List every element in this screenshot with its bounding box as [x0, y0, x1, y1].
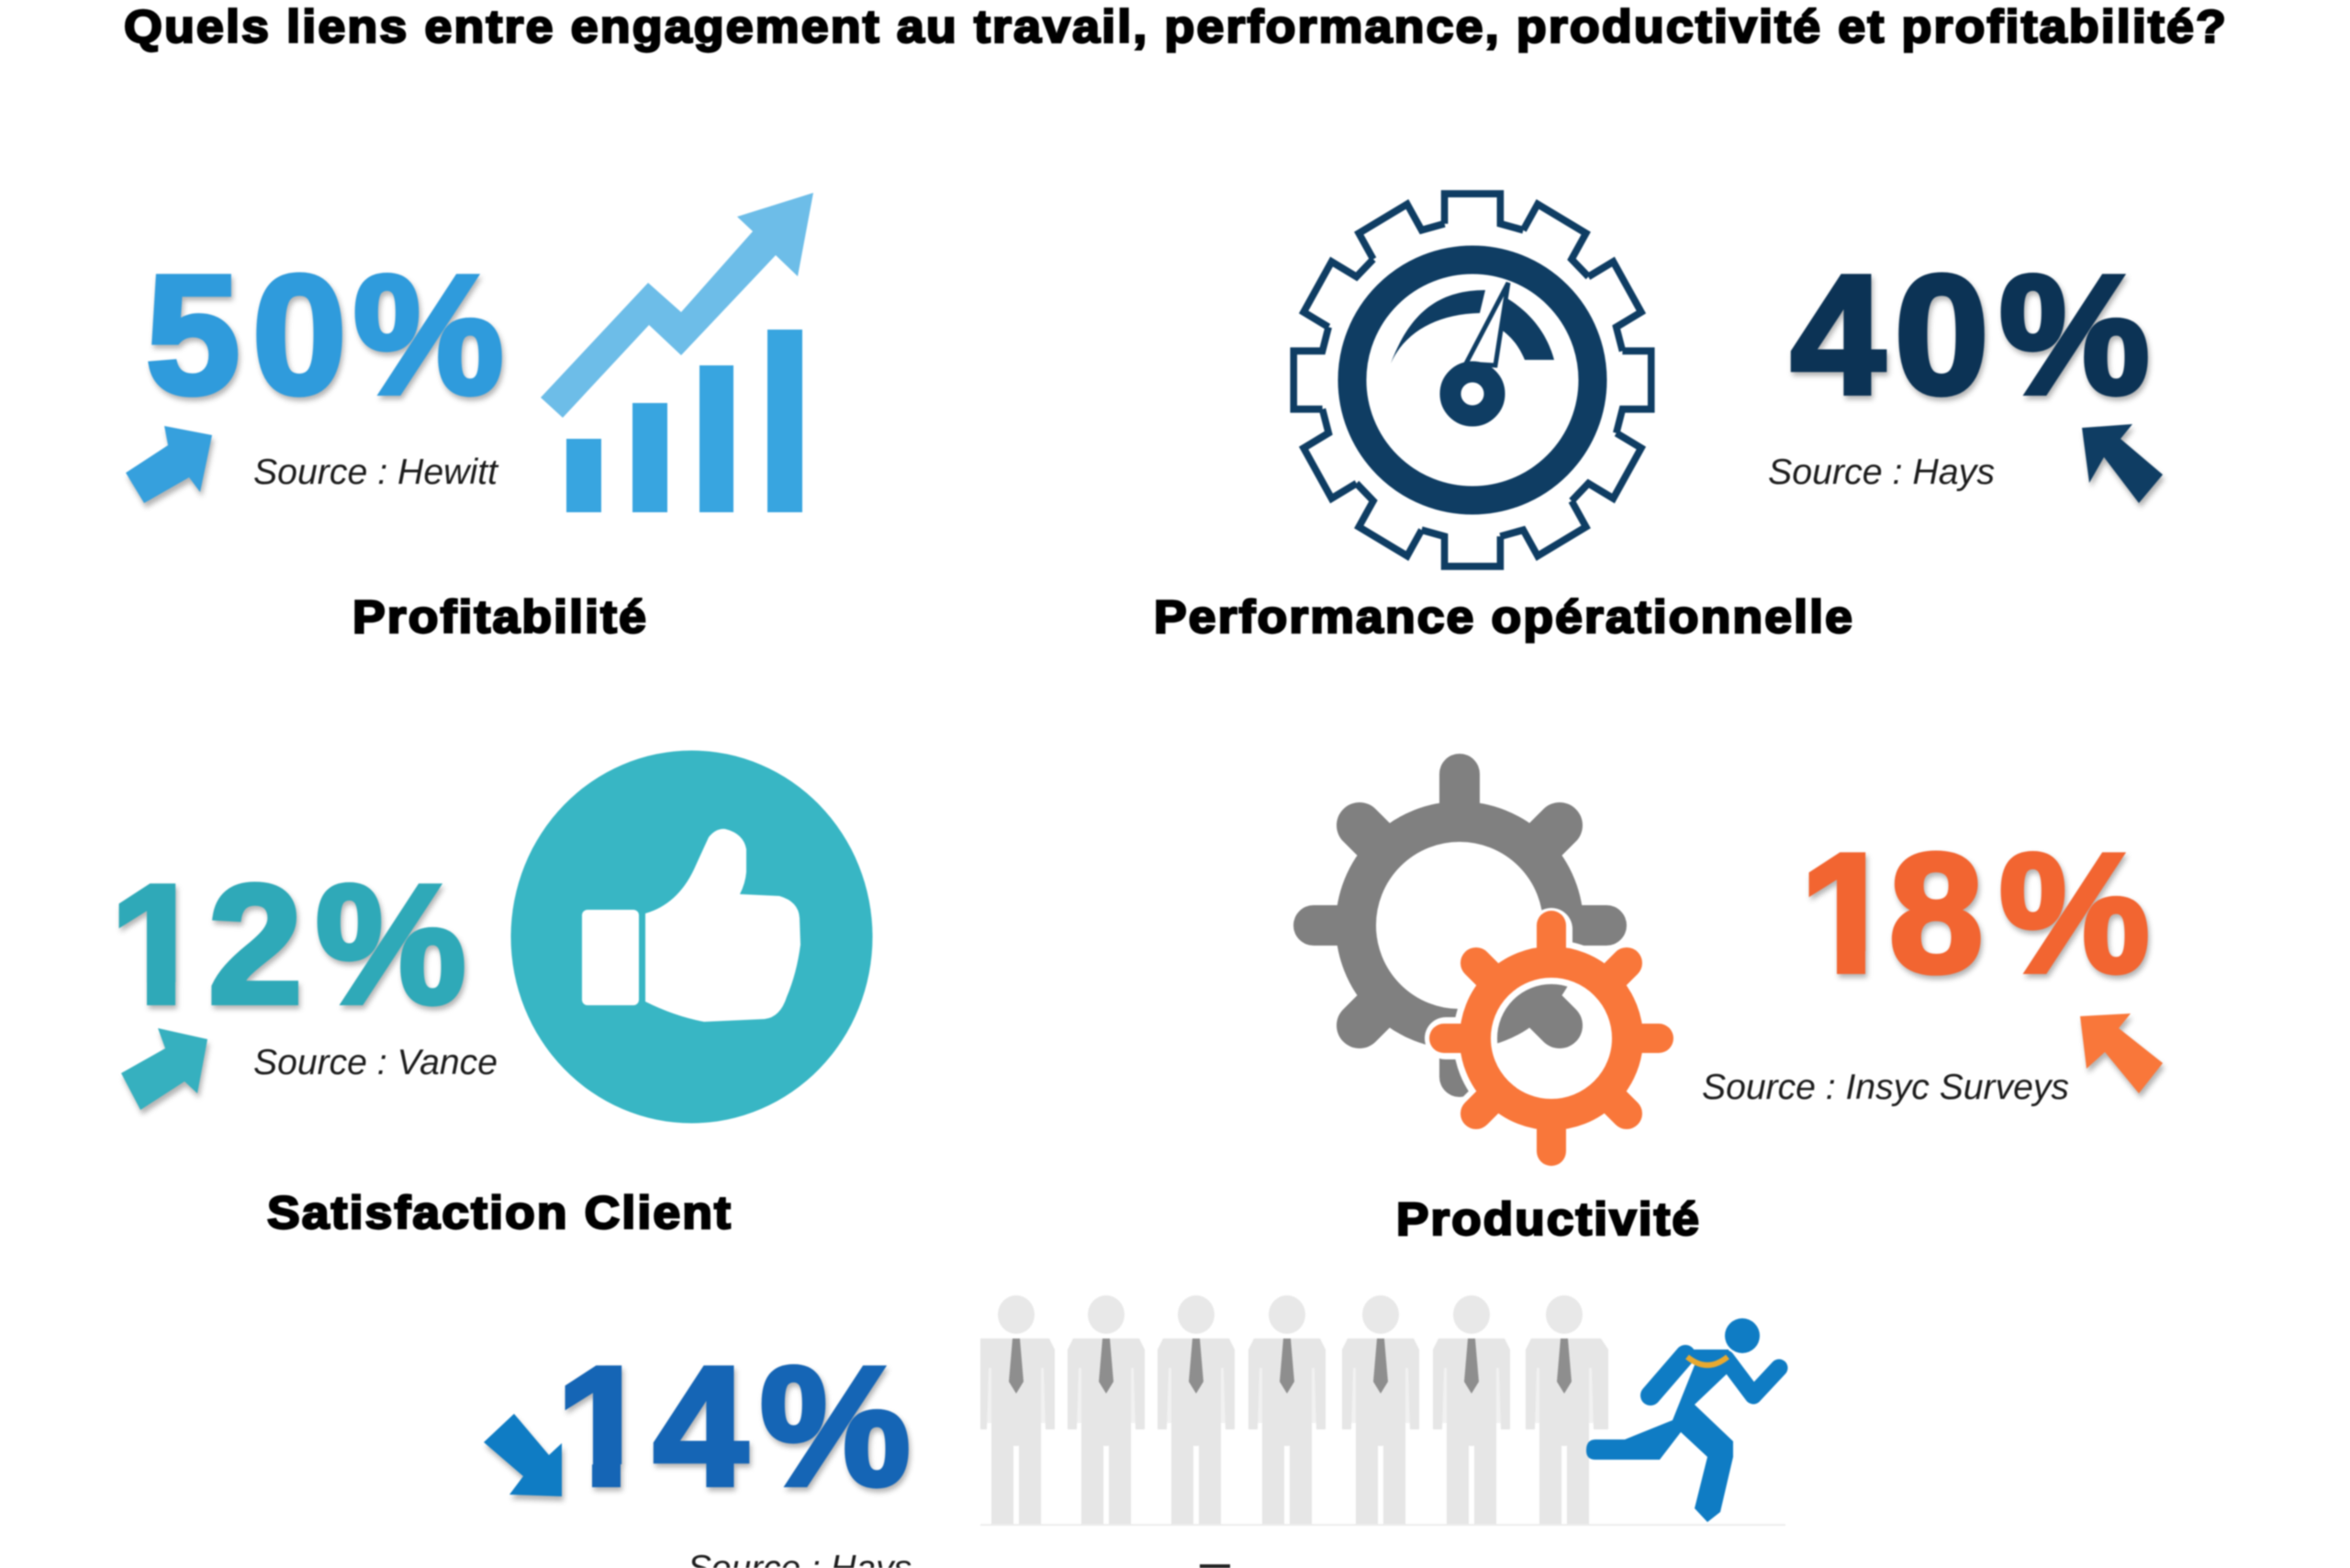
arrow: up left	[2082, 424, 2163, 503]
source: Hays: Source : Hays	[1768, 453, 1995, 492]
source: Insyc Surveys: Source : Insyc Surveys	[1702, 1068, 2069, 1107]
panel: profitabilité	[126, 193, 813, 643]
figure 3	[1158, 1295, 1235, 1524]
figure 4	[1248, 1295, 1326, 1524]
arrow: down right	[484, 1414, 562, 1496]
arrow: up right	[121, 1028, 207, 1110]
label: Performance opérationnelle: Performance opérationnelle	[1154, 591, 1854, 643]
icon: running employee	[1586, 1318, 1779, 1522]
stat: 14%: 14%	[556, 1331, 911, 1520]
icon: row of standing employees	[980, 1295, 1785, 1525]
clipped label top	[1200, 1564, 1230, 1568]
figure 1	[980, 1295, 1055, 1524]
title: Quels liens entre engagement au travail, performance, productivité et profitabilité?	[124, 1, 2228, 52]
arrow: up left	[2080, 1014, 2163, 1093]
arrow: up right	[126, 426, 212, 503]
label: Profitabilité: Profitabilité	[352, 591, 648, 643]
label: Productivité: Productivité	[1396, 1193, 1701, 1245]
figure 7	[1526, 1295, 1608, 1524]
icon: grey and orange gears	[1314, 774, 1659, 1151]
stat: 40%: 40%	[1791, 240, 2150, 429]
panel: performance opérationnelle	[1154, 192, 2163, 643]
icon: thumbs up	[510, 751, 872, 1124]
panel: satisfaction client	[110, 751, 872, 1238]
bar chart icon	[566, 330, 802, 512]
stat: 50%: 50%	[146, 240, 504, 429]
label: Satisfaction Client: Satisfaction Client	[267, 1187, 733, 1238]
stat: 18%: 18%	[1800, 818, 2150, 1007]
stat: 12%: 12%	[110, 849, 466, 1038]
source: Hewitt: Source : Hewitt	[253, 453, 499, 492]
icon: rising arrow	[541, 193, 813, 418]
panel: turnover row	[484, 1295, 1785, 1568]
panel: productivité	[1314, 774, 2163, 1245]
figure 5	[1342, 1295, 1419, 1524]
figure 6	[1433, 1295, 1510, 1524]
icon: gear with gauge	[1292, 192, 1652, 568]
source: Vance: Source : Vance	[253, 1043, 498, 1082]
figure 2	[1068, 1295, 1145, 1524]
